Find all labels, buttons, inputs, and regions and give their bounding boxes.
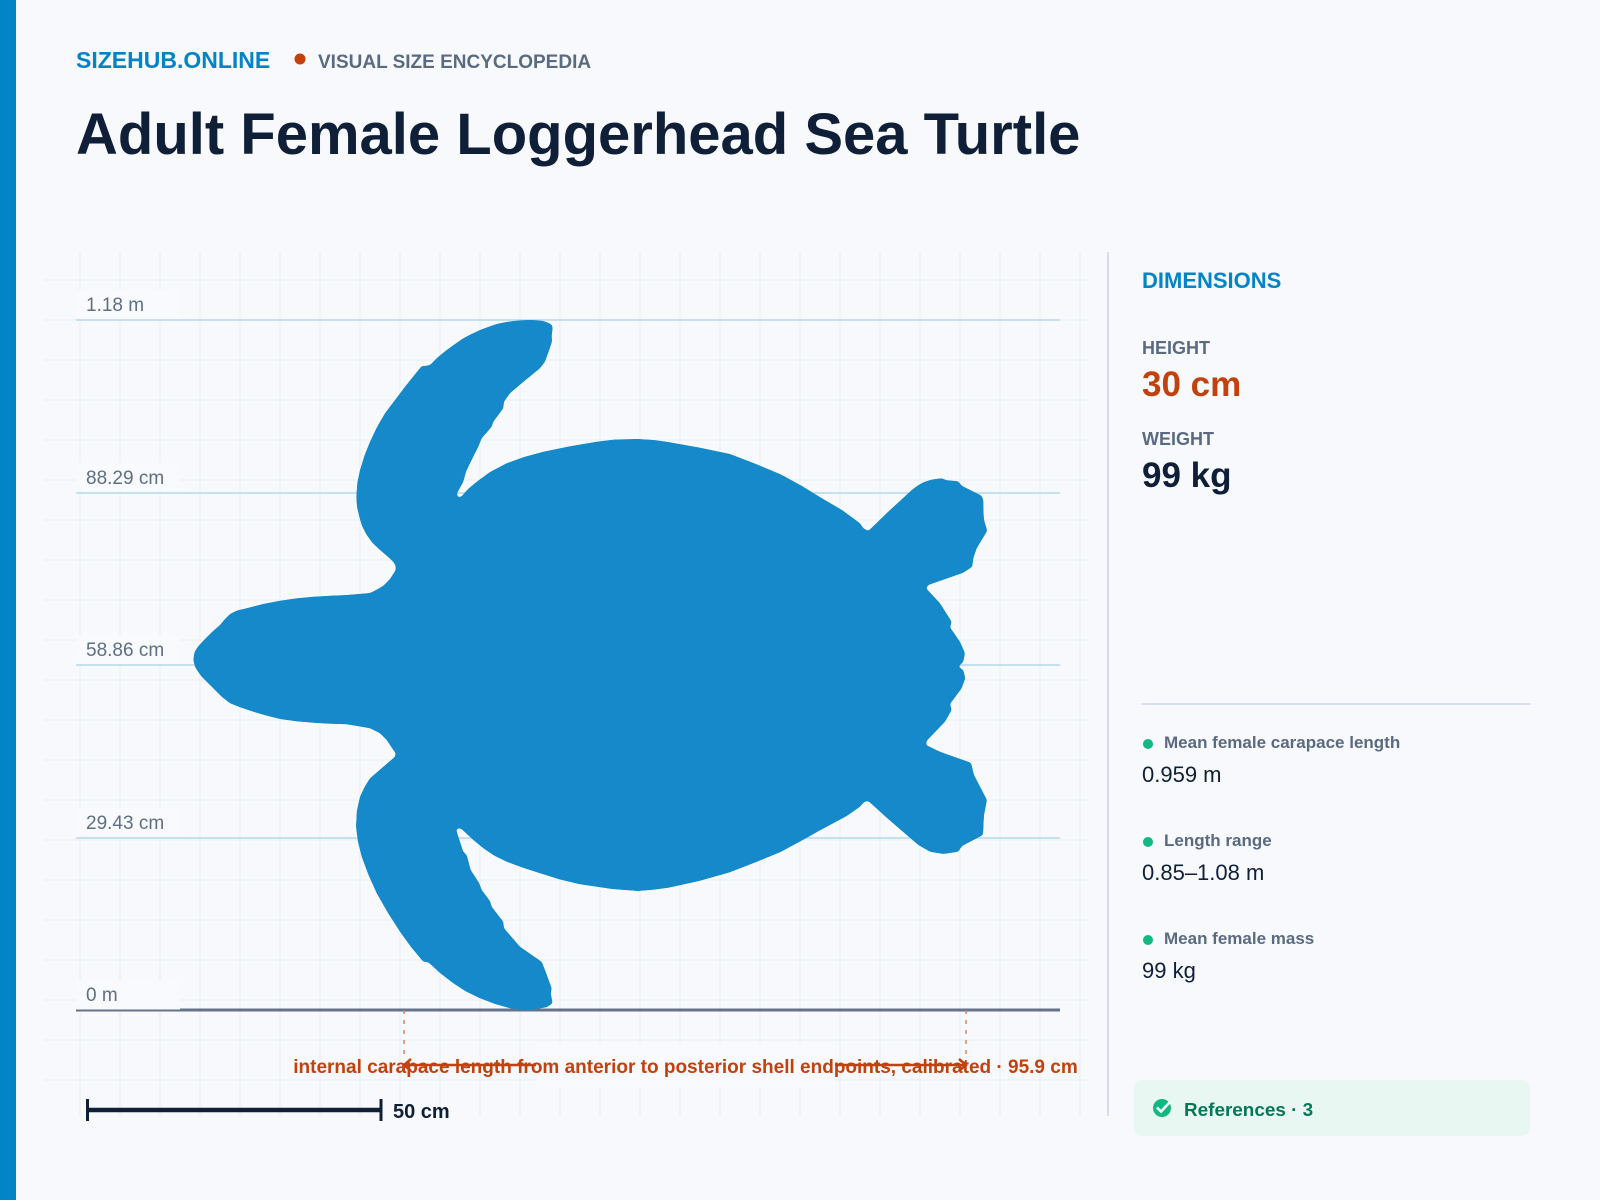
measurement arrow — [404, 1059, 966, 1071]
weight stat: 99 kg — [1142, 456, 1232, 495]
length measurement — [293, 1010, 1078, 1087]
fact: length range: 0.85–1.08 m — [1142, 860, 1264, 885]
scale bar label: 50 cm — [393, 1101, 450, 1123]
brand name: SIZEHUB.ONLINE — [76, 47, 270, 73]
label: 0 m: 0 m — [86, 985, 118, 1006]
height guide lines — [76, 320, 1060, 838]
label: 29.43 cm: 29.43 cm — [86, 813, 164, 834]
references label: References · 3 — [1184, 1100, 1313, 1121]
fact: mean mass — [1142, 929, 1314, 983]
references badge — [1134, 1080, 1530, 1136]
fact: mean mass: Mean female mass — [1164, 929, 1314, 948]
scale bar — [88, 1099, 450, 1123]
fact: carapace length: 0.959 m — [1142, 762, 1222, 787]
panel divider — [1107, 252, 1109, 1116]
scale labels — [76, 290, 180, 1010]
tagline: VISUAL SIZE ENCYCLOPEDIA — [318, 52, 591, 73]
chart: turtle size silhouette — [44, 252, 1088, 1123]
label: 1.18 m: 1.18 m — [86, 295, 144, 316]
turtle silhouette — [193, 320, 987, 1010]
brand separator dot — [294, 54, 306, 64]
label: 1.18 m — [76, 290, 180, 318]
background grid — [44, 252, 1088, 1116]
panel: dimensions — [1142, 268, 1281, 495]
label: 58.86 cm: 58.86 cm — [86, 640, 164, 661]
icon: check circle — [1153, 1099, 1171, 1117]
header — [76, 47, 1080, 167]
fact: carapace length — [1142, 733, 1400, 787]
height stat: 30 cm — [1142, 365, 1241, 404]
facts divider — [1142, 703, 1530, 705]
weight stat — [1142, 429, 1232, 495]
dotted extent lines — [404, 1010, 966, 1054]
measurement label: internal carapace length from anterior to posterior shell endpoints, calibrated · 95.9 cm — [293, 1057, 1078, 1078]
label: 29.43 cm — [76, 808, 180, 836]
label: 58.86 cm — [76, 635, 180, 663]
fact: carapace length: Mean female carapace length — [1164, 733, 1400, 752]
left accent bar — [0, 0, 16, 1200]
panel heading: DIMENSIONS — [1142, 268, 1281, 293]
annotation background — [536, 1043, 835, 1087]
title: Adult Female Loggerhead Sea Turtle — [76, 102, 1080, 167]
panel: key facts — [1142, 733, 1400, 983]
fact: length range: Length range — [1164, 831, 1272, 850]
baseline — [76, 1008, 1060, 1012]
height stat: HEIGHT — [1142, 338, 1210, 358]
label: 88.29 cm: 88.29 cm — [86, 468, 164, 489]
visible arrow shafts — [404, 1064, 966, 1066]
fact: length range — [1142, 831, 1272, 885]
label: 88.29 cm — [76, 463, 180, 491]
label: 0 m — [76, 980, 180, 1010]
weight stat: WEIGHT — [1142, 429, 1214, 449]
fact: mean mass: 99 kg — [1142, 958, 1196, 983]
height stat — [1142, 338, 1241, 404]
